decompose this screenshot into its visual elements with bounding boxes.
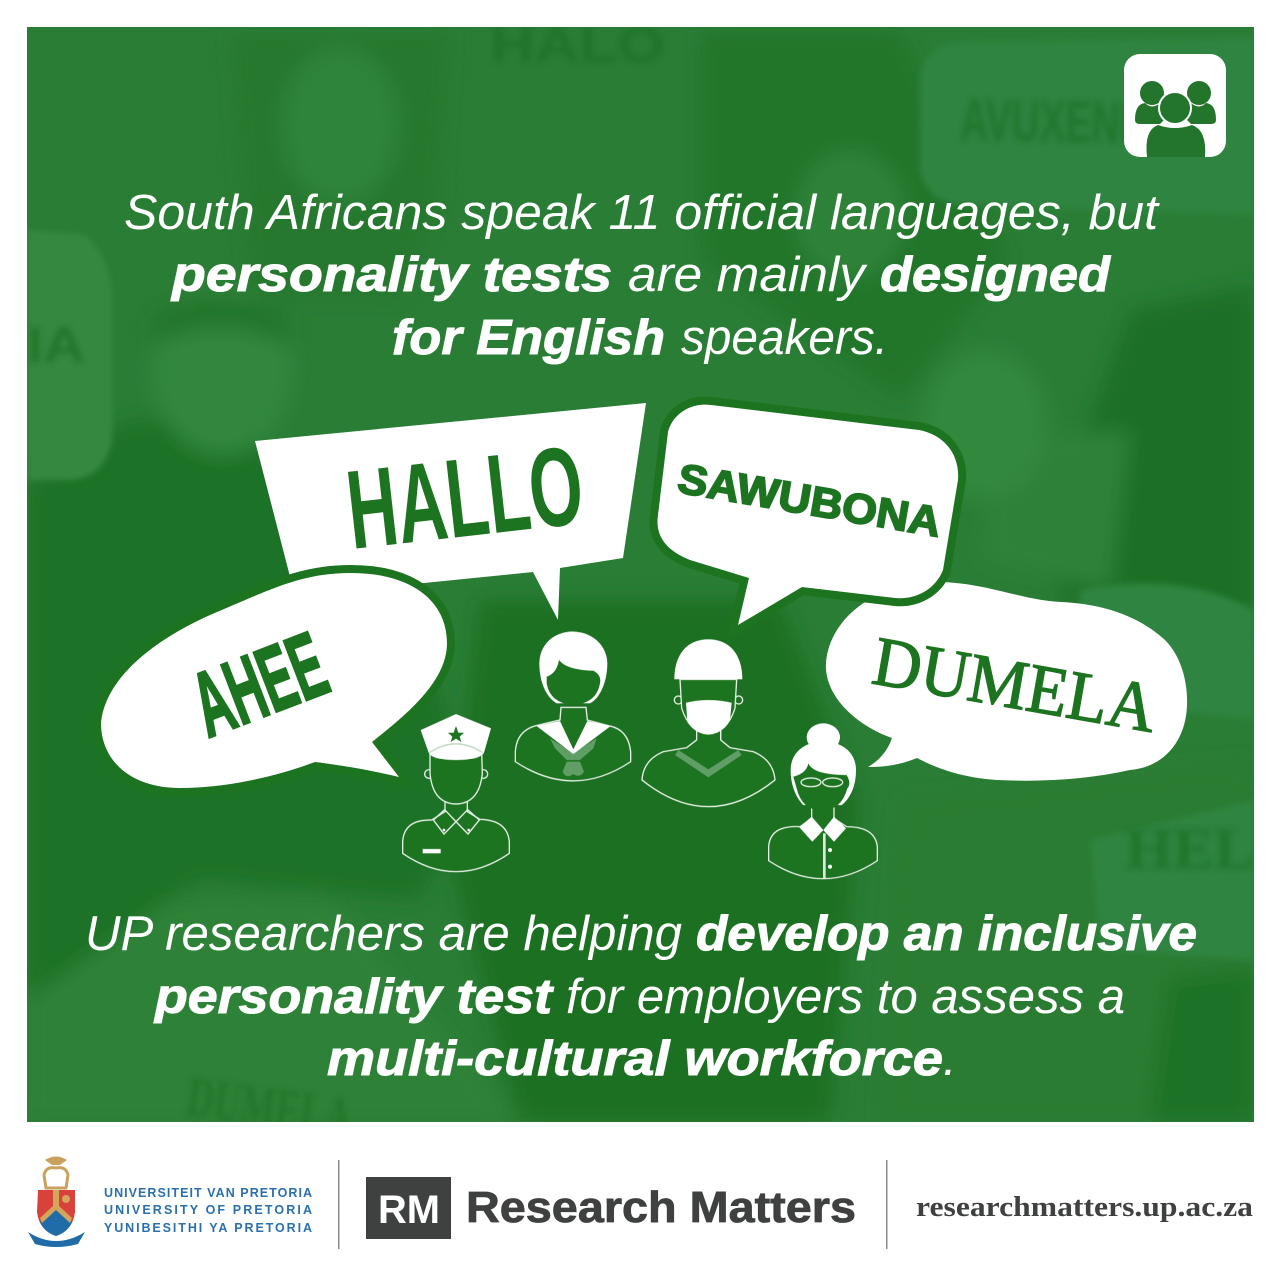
text: university name — [104, 1186, 312, 1235]
website url: researchmatters.up.ac.za — [916, 1192, 1253, 1223]
logo: RM square: RM — [378, 1188, 440, 1232]
body text: bottom statement: . — [943, 1032, 957, 1086]
faint placard words in photo: AVUXENI — [960, 88, 1131, 156]
heading: top statement: designed — [880, 248, 1111, 302]
heading: top statement: South Africans speak 11 official languages, but — [124, 186, 1160, 240]
speech bubble: AHEE — [101, 573, 447, 788]
heading: top statement: for English — [392, 311, 665, 365]
text: university name: UNIVERSITY OF PRETORIA — [104, 1203, 312, 1217]
speech bubble: DUMELA: DUMELA — [867, 623, 1163, 748]
body text: bottom statement: UP researchers are helping — [85, 907, 682, 961]
faint placard words in photo: DUMELA — [183, 1064, 356, 1151]
heading: top statement — [124, 186, 1160, 365]
speech bubble: SAWUBONA — [657, 405, 958, 625]
person: surgeon — [642, 639, 775, 807]
logo: RM square — [366, 1177, 451, 1239]
heading: top statement: personality tests — [170, 248, 612, 302]
faint placard words in photo: HEL — [1125, 816, 1255, 881]
body text: bottom statement: personality test — [153, 970, 554, 1024]
text: university name: YUNIBESITHI YA PRETORIA — [104, 1221, 312, 1235]
body text: bottom statement: multi-cultural workforce — [327, 1032, 943, 1086]
speech bubble: HALLO — [255, 403, 646, 620]
body text: bottom statement — [85, 907, 1197, 1086]
text: university name: UNIVERSITEIT VAN PRETORIA — [104, 1186, 312, 1200]
speech bubble: AHEE: AHEE — [179, 613, 340, 757]
speech bubble: DUMELA — [826, 582, 1187, 781]
icon: group of people — [1124, 54, 1226, 157]
body text: bottom statement: for employers to assess a — [566, 970, 1125, 1024]
faint placard words in photo: HALO — [490, 17, 665, 73]
logo: University of Pretoria crest — [28, 1156, 85, 1247]
heading: top statement: speakers. — [681, 311, 888, 365]
person: woman with glasses — [769, 723, 877, 879]
people illustration — [403, 632, 877, 879]
person: officer with cap — [403, 714, 509, 872]
brand name: Research Matters: Research Matters — [466, 1183, 856, 1232]
speech bubble: SAWUBONA: SAWUBONA — [674, 455, 945, 546]
faint placard words in photo: IA — [27, 317, 85, 373]
person: sailor — [515, 632, 631, 781]
body text: bottom statement: develop an inclusive — [696, 907, 1197, 961]
heading: top statement: are mainly — [628, 248, 868, 302]
speech bubble: HALLO: HALLO — [341, 422, 589, 573]
